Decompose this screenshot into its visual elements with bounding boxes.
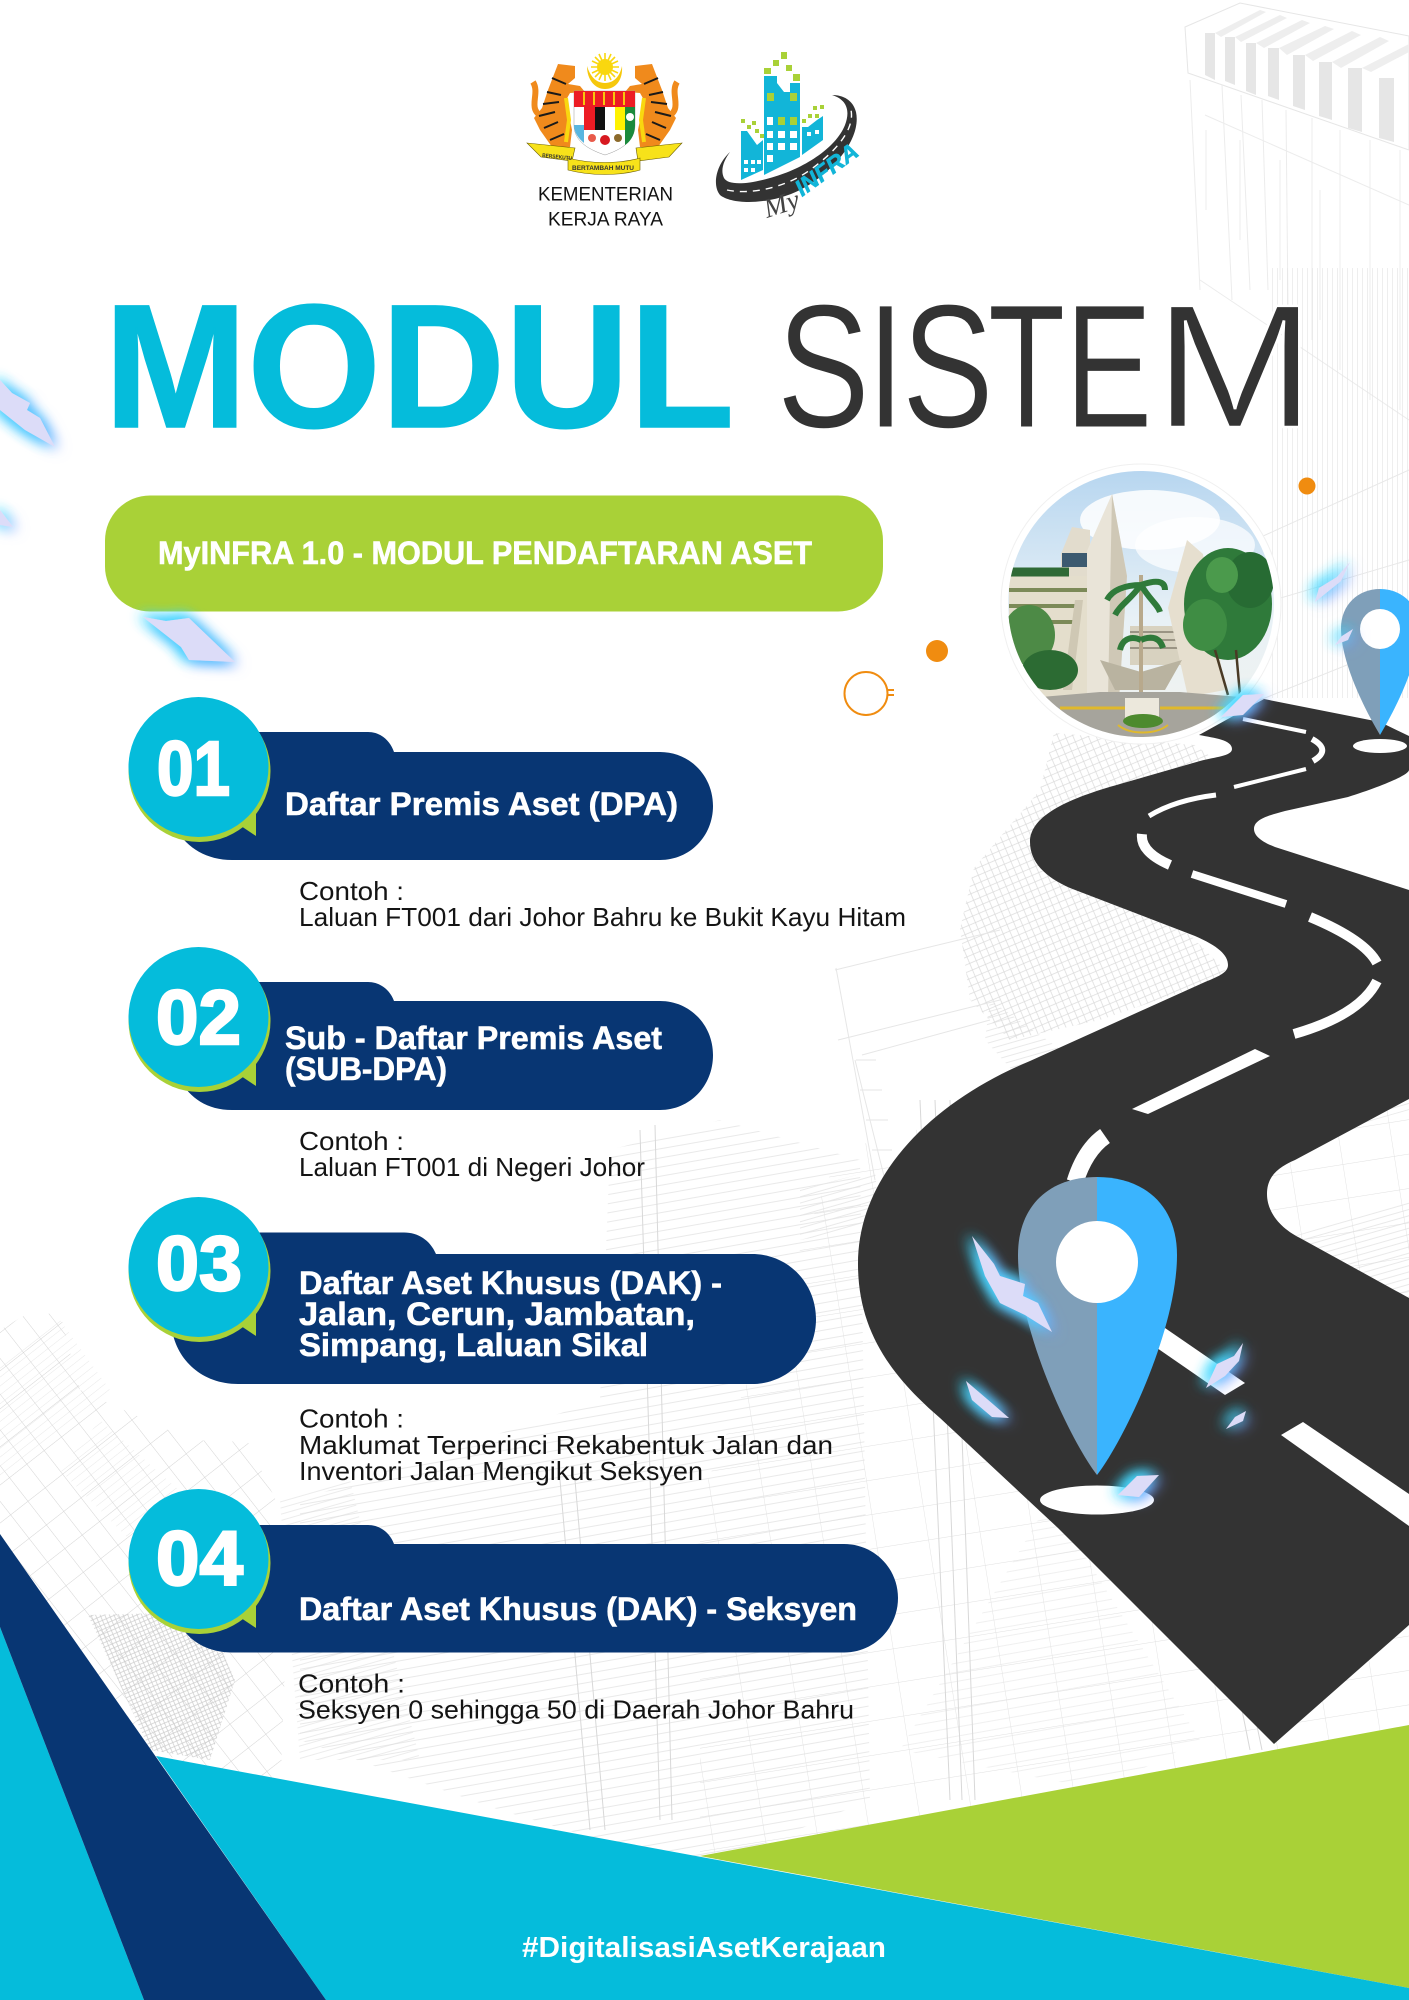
decorative orange dots: [844, 478, 1316, 715]
location pin: large near: [1018, 1177, 1177, 1514]
footer: cyan band: [156, 1756, 1409, 2000]
logo buildings: [741, 52, 824, 180]
title: T: [988, 269, 1066, 465]
step 04 bar: [179, 1525, 898, 1652]
step 03 badge: 03: [156, 1221, 242, 1307]
step 03 heading: [299, 1265, 722, 1363]
footer: left cyan triangle: [0, 1627, 144, 2000]
step 04 example: Contoh :: [298, 1668, 405, 1698]
footer: navy wedge: [0, 1534, 326, 2000]
glowing sparkle flakes: [0, 380, 1353, 1497]
step 02 example: [299, 1126, 645, 1182]
scroll with motto: BERSEKUTU: [542, 153, 572, 162]
logo: MyINFRA: [716, 52, 863, 224]
step 04 heading: Daftar Aset Khusus (DAK) - Seksyen: [299, 1591, 857, 1627]
step 04 badge: [128, 1489, 270, 1634]
step 01 heading: Daftar Premis Aset (DPA): [285, 786, 678, 822]
step 01 badge: 01: [157, 726, 230, 812]
shield: [574, 91, 635, 155]
step 02 heading: [285, 1020, 662, 1087]
step 01 example: Contoh :: [299, 876, 404, 906]
logo: Kementerian Kerja Raya coat of arms: [527, 53, 682, 230]
step 03 heading: Daftar Aset Khusus (DAK) -: [299, 1265, 722, 1301]
title: I: [867, 269, 904, 465]
step 03 heading: Jalan, Cerun, Jambatan,: [299, 1296, 695, 1332]
step 02 example: Contoh :: [299, 1126, 404, 1156]
step 02 bar: [180, 982, 713, 1110]
step 04 example: Seksyen 0 sehingga 50 di Daerah Johor Bahru: [298, 1694, 854, 1724]
hashtag: #DigitalisasiAsetKerajaan: [522, 1932, 886, 1964]
step 03 example: Maklumat Terperinci Rekabentuk Jalan dan: [299, 1430, 833, 1460]
module banner: MyINFRA 1.0 - MODUL PENDAFTARAN ASET: [158, 535, 812, 571]
step 02 heading: (SUB-DPA): [285, 1051, 447, 1087]
step 02 heading: Sub - Daftar Premis Aset: [285, 1020, 662, 1056]
step 03 example: [299, 1404, 833, 1486]
step 03: [128, 1197, 833, 1486]
module banner: [105, 496, 883, 612]
step 02 badge: [128, 947, 270, 1092]
title: M: [1154, 269, 1315, 465]
step 01 badge: [128, 697, 270, 842]
sun and crescent: [587, 53, 622, 89]
location pin: small far: [1341, 589, 1409, 753]
step 04 example: [298, 1668, 854, 1724]
step 04: [128, 1489, 898, 1724]
step 01 example: Laluan FT001 dari Johor Bahru ke Bukit Kayu Hitam: [299, 902, 906, 932]
title: S: [902, 269, 994, 465]
scroll with motto: BERTAMBAH MUTU: [572, 165, 634, 172]
logo wordmark: INFRA: [790, 138, 863, 201]
title: E: [1065, 269, 1152, 465]
step 03 example: Inventori Jalan Mengikut Seksyen: [299, 1456, 703, 1486]
step 01 bar: [177, 732, 713, 860]
tiger left: [533, 64, 585, 147]
footer: green triangle: [700, 1725, 1409, 1988]
road: [858, 699, 1409, 1744]
step 03 bar: [172, 1232, 816, 1384]
title: S: [777, 269, 870, 465]
logo road swoosh: [716, 95, 857, 202]
step 01: [128, 697, 906, 932]
scroll with motto: [527, 143, 682, 174]
step 03 heading: Simpang, Laluan Sikal: [299, 1327, 648, 1363]
logo wordmark: [759, 138, 863, 224]
ministry name: KEMENTERIAN: [538, 184, 673, 206]
step 04 badge: 04: [156, 1516, 243, 1602]
step 01 example: [299, 876, 906, 932]
step 02: [128, 947, 713, 1182]
photo: ministry building: [1001, 464, 1281, 744]
logo wordmark: My: [759, 184, 803, 224]
ministry name: [538, 184, 673, 230]
step 03 example: Contoh :: [299, 1404, 404, 1434]
title: [104, 269, 1315, 465]
tiger right: [625, 64, 677, 147]
road lane markings: [1075, 719, 1409, 1526]
step 02 example: Laluan FT001 di Negeri Johor: [299, 1152, 645, 1182]
title: MODUL: [104, 269, 734, 465]
step 03 badge: [128, 1197, 270, 1342]
ministry name: KERJA RAYA: [548, 208, 663, 230]
step 02 badge: 02: [156, 975, 241, 1061]
